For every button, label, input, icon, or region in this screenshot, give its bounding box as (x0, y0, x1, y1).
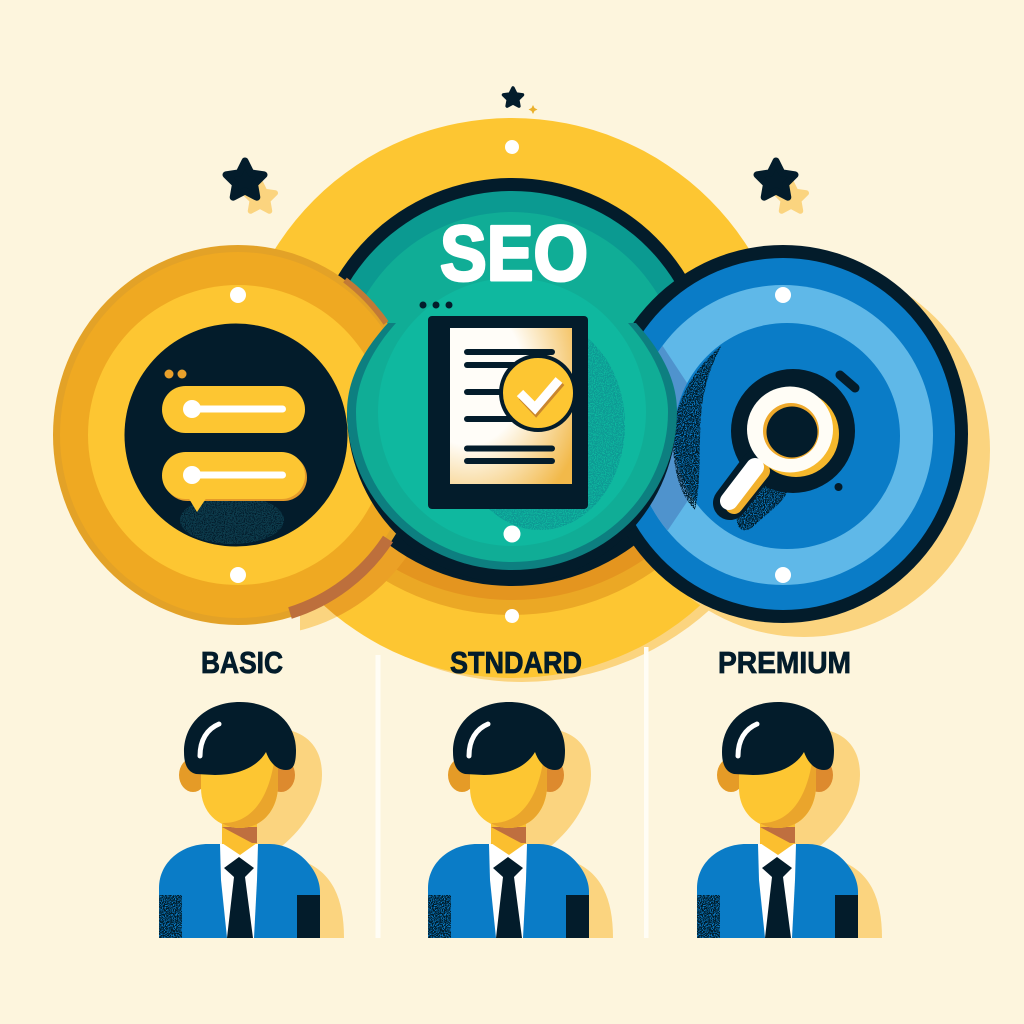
icon: person premium (697, 702, 882, 938)
icon: document with check badge (420, 302, 588, 509)
star: top right (757, 161, 806, 211)
panel: premium circle (598, 245, 968, 623)
drop shadow: premium circle (618, 263, 990, 637)
icon: person standard (428, 702, 613, 938)
star: top left (226, 161, 275, 211)
icon: magnifying glass (729, 369, 855, 505)
icon: chat bubbles (124, 324, 348, 546)
panel: standard circle lower body (347, 278, 677, 583)
icon: person basic (159, 702, 344, 938)
grain shading (673, 345, 722, 510)
title: SEO: SEO (440, 209, 588, 297)
panel: standard circle upper rim (308, 178, 716, 586)
divider: right (644, 647, 648, 938)
panel: basic circle (53, 245, 423, 625)
icon: check badge (501, 356, 575, 430)
divider: left (376, 655, 380, 938)
star: top centre (504, 88, 538, 114)
label: standard: STNDARD (450, 645, 582, 680)
label: premium: PREMIUM (718, 645, 851, 680)
label: basic: BASIC (201, 645, 283, 680)
large yellow backdrop circle (275, 118, 749, 682)
